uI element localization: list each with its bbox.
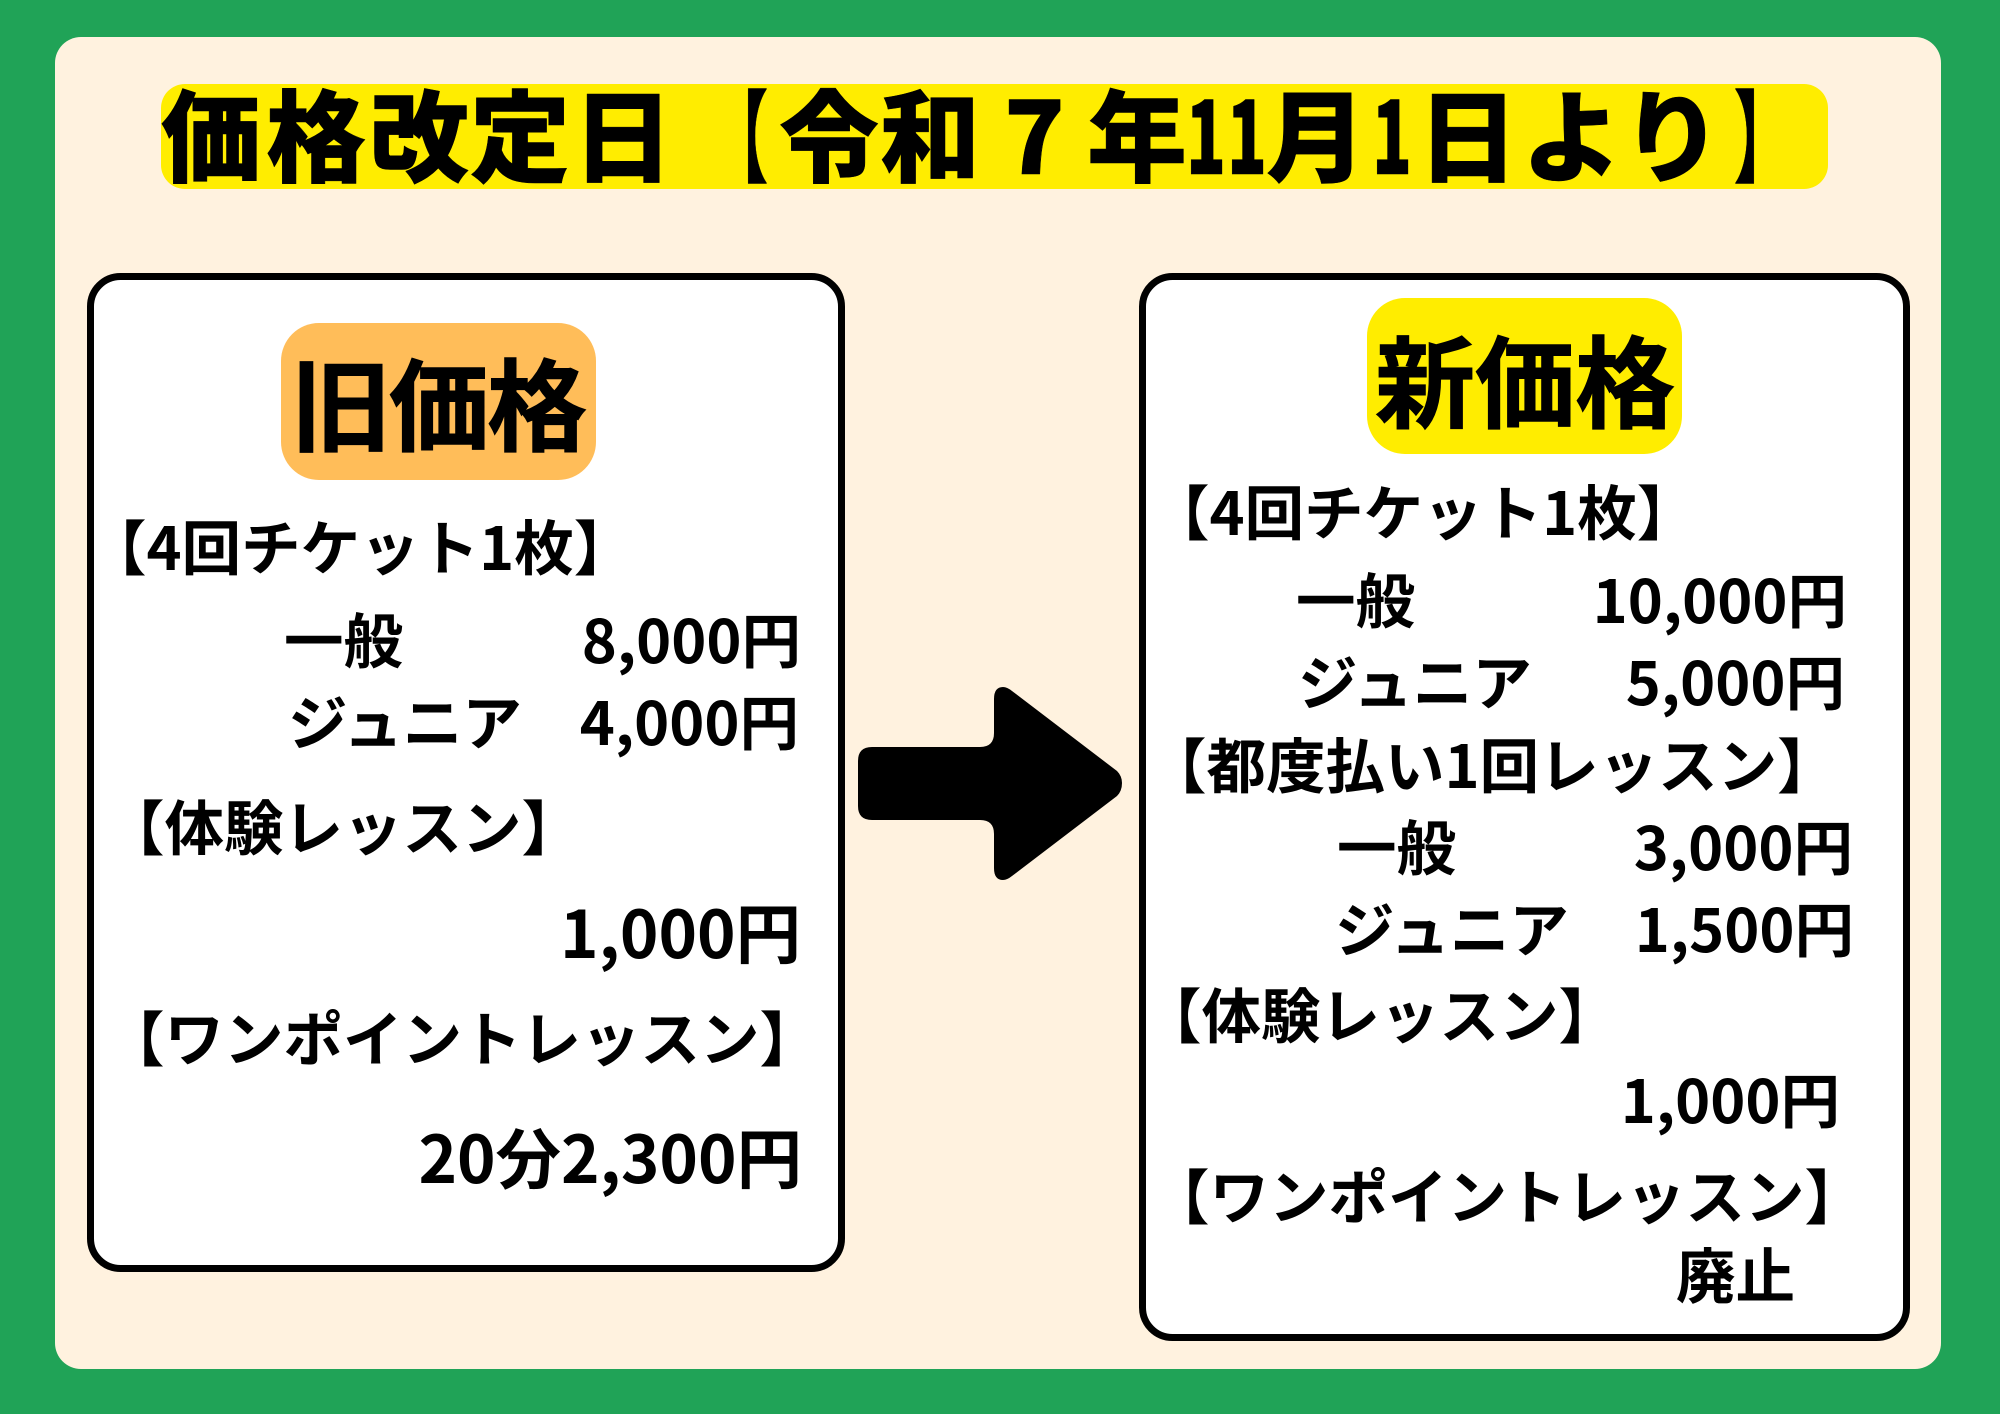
- section: trial lesson: [1142, 970, 1840, 1141]
- heading badge: new price: 新価格: [1375, 304, 1675, 449]
- title text: よ: [1522, 58, 1622, 203]
- title text: 令: [779, 58, 879, 203]
- title text: 定: [470, 58, 570, 203]
- section: 4-ticket pass: [87, 502, 801, 763]
- arrow: [858, 687, 1122, 880]
- section: one-point lesson: 20分2,300円: [418, 1107, 802, 1202]
- section: 4-ticket pass: ジュニア: [288, 677, 522, 763]
- section: pay-per-lesson: ジュニア: [1335, 884, 1569, 970]
- title highlight bar: [161, 84, 1828, 189]
- heading badge: old price: 旧価格: [291, 327, 587, 472]
- title text: 】: [1734, 58, 1792, 203]
- section: 4-ticket pass: 一般: [284, 595, 403, 681]
- section: trial lesson: 【体験レッスン】: [105, 782, 581, 868]
- old price card: [90, 276, 842, 1268]
- title text: 改: [369, 58, 469, 203]
- title text: 1: [1227, 58, 1267, 203]
- section: 4-ticket pass: 10,000円: [1593, 555, 1847, 641]
- section: trial lesson: [105, 782, 801, 977]
- title text: 価: [161, 58, 261, 203]
- section: pay-per-lesson: 【都度払い1回レッスン】: [1147, 720, 1837, 806]
- title text: 和: [880, 58, 980, 203]
- panel: new price: [1142, 276, 1906, 1338]
- section: 4-ticket pass: 一般: [1296, 555, 1415, 641]
- section: trial lesson: 1,000円: [1621, 1055, 1840, 1141]
- title text: 月: [1266, 58, 1366, 203]
- section: one-point lesson: 【ワンポイントレッスン】: [105, 993, 819, 1079]
- section: trial lesson: 1,000円: [560, 882, 801, 977]
- section: 4-ticket pass: [1150, 467, 1847, 723]
- new price card: [1142, 276, 1906, 1338]
- section: pay-per-lesson: 一般: [1337, 802, 1456, 888]
- section: 4-ticket pass: 8,000円: [582, 595, 801, 681]
- title text: 7: [1004, 58, 1065, 203]
- section: pay-per-lesson: 1,500円: [1635, 884, 1854, 970]
- section: 4-ticket pass: 5,000円: [1626, 637, 1845, 723]
- title text: 1: [1186, 58, 1226, 203]
- section: trial lesson: 【体験レッスン】: [1142, 970, 1618, 1056]
- section: 4-ticket pass: 【4回チケット1枚】: [1150, 467, 1696, 553]
- section: one-point lesson: 廃止: [1676, 1230, 1795, 1316]
- section: one-point lesson: [1150, 1151, 1864, 1316]
- panel: old price: [87, 276, 842, 1268]
- title text: 【: [710, 58, 768, 203]
- title text: 日: [573, 58, 673, 203]
- section: one-point lesson: 【ワンポイントレッスン】: [1150, 1151, 1864, 1237]
- section: pay-per-lesson: 3,000円: [1634, 802, 1853, 888]
- section: 4-ticket pass: ジュニア: [1298, 637, 1532, 723]
- title text: 日: [1418, 58, 1518, 203]
- section: pay-per-lesson: [1147, 720, 1854, 970]
- title text: り: [1622, 58, 1722, 203]
- title text: 年: [1087, 58, 1187, 203]
- title text: 1: [1372, 58, 1412, 203]
- section: one-point lesson: [105, 993, 819, 1202]
- section: 4-ticket pass: 【4回チケット1枚】: [87, 502, 633, 588]
- title text: 格: [266, 58, 366, 203]
- section: 4-ticket pass: 4,000円: [580, 677, 799, 763]
- title text: [161, 58, 1792, 203]
- title: price revision date: [161, 58, 1828, 203]
